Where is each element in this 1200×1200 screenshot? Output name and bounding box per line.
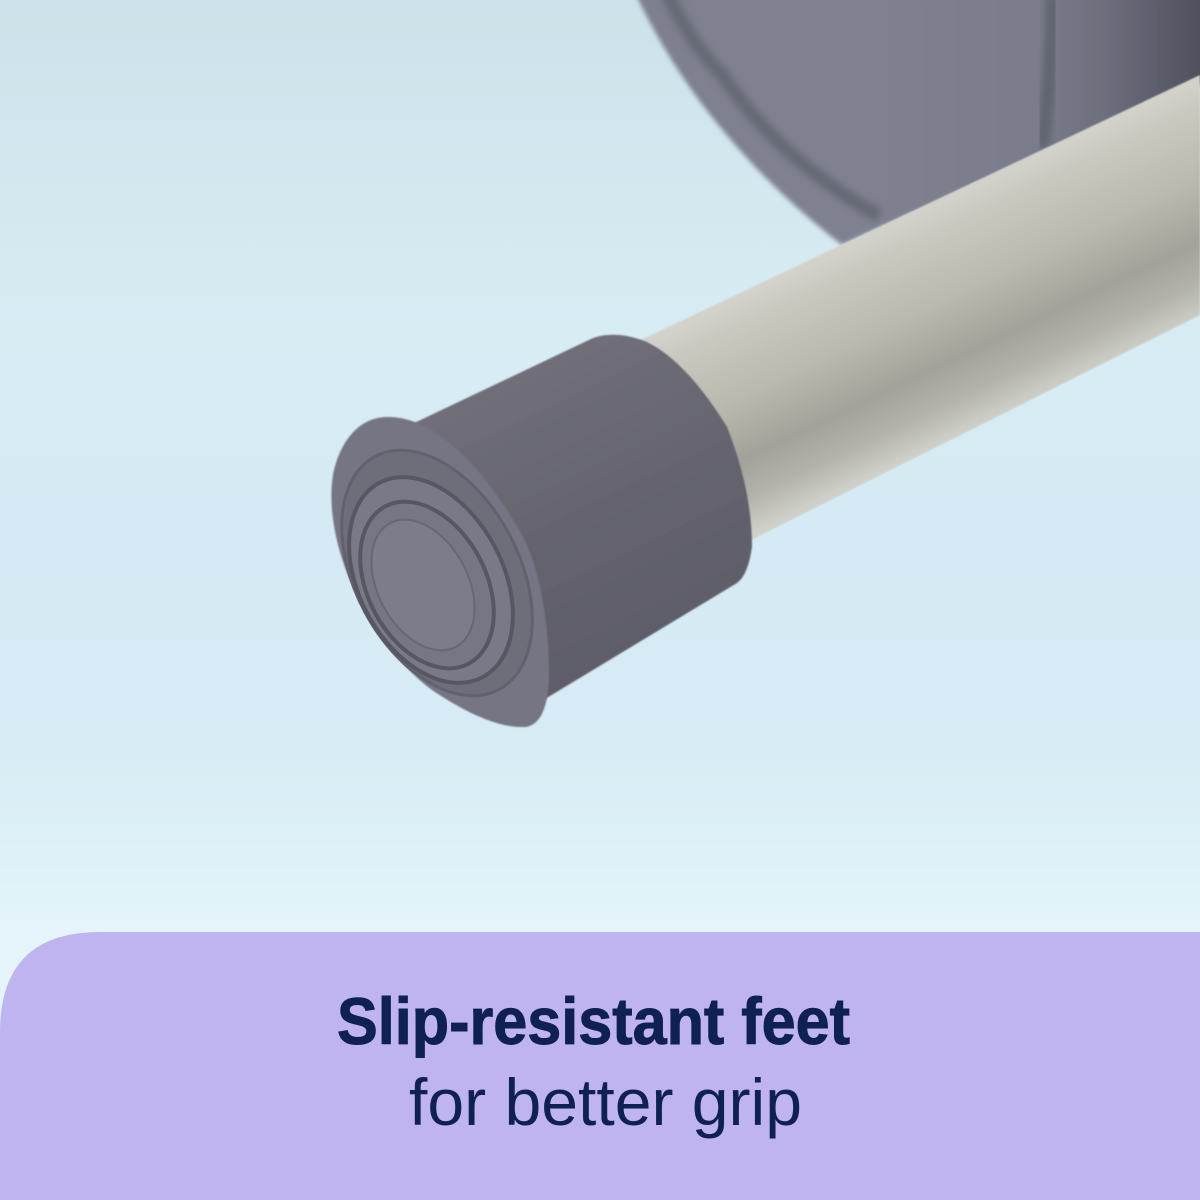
seat disc (636, 0, 1200, 245)
caption heading: Slip-resistant feet (337, 984, 850, 1058)
tube (630, 75, 1200, 548)
rubber foot (303, 335, 752, 728)
foot body (410, 335, 752, 705)
centre disc (350, 502, 496, 668)
caption subtext: for better grip (409, 1065, 802, 1139)
outer ring (303, 418, 571, 728)
foot rim (331, 417, 549, 727)
caption panel (0, 932, 1200, 1200)
second ring (316, 449, 546, 711)
third ring (333, 479, 521, 691)
